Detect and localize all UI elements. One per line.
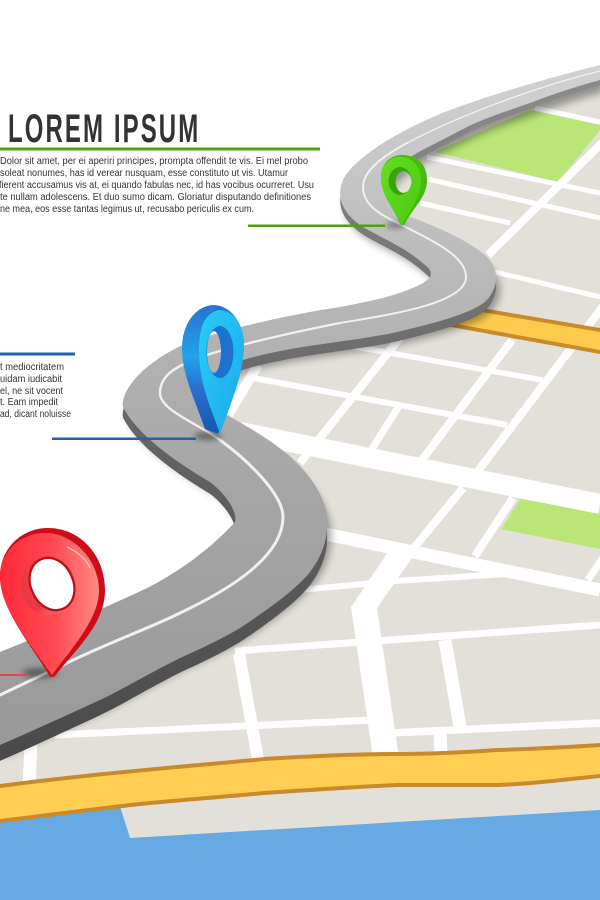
water	[0, 770, 600, 900]
green connector line	[248, 224, 385, 227]
text block: top paragraph	[0, 156, 314, 215]
text block: middle paragraph	[0, 362, 71, 420]
text block: top paragraph: soleat nonumes, has id verear nusquam, esse constituto ut vis. Utamur	[0, 168, 289, 179]
road centre line	[0, 71, 600, 695]
text block: top paragraph: te nullam adolescens. Et duo sumo dicam. Gloriatur disputando definitiones	[0, 192, 311, 203]
shore land	[118, 770, 600, 838]
pin shadows	[22, 222, 406, 678]
text block: top paragraph: ne mea, eos esse tantas legimus ut, recusabo periculis ex cum.	[0, 204, 254, 215]
title: LOREM IPSUM	[8, 106, 198, 150]
road shadow	[4, 77, 600, 757]
text block: top paragraph: Dolor sit amet, per ei aperiri principes, prompta offendit te vis. Ei mel probo	[0, 156, 308, 167]
blue heading rule	[0, 352, 75, 356]
red connector line	[0, 674, 27, 676]
parks	[435, 110, 600, 549]
upper yellow highway	[440, 301, 600, 354]
street grid	[29, 108, 600, 790]
text block: middle paragraph: el, ne sit vocent	[0, 386, 63, 397]
icon: red map pin	[0, 528, 105, 677]
text block: middle paragraph: t. Eam impedit	[0, 397, 58, 408]
road surface	[0, 65, 600, 745]
text block: top paragraph: fierent accusamus vis at, ei quando fabulas nec, id has vocibus ocurreret. Usu	[0, 180, 314, 191]
road side wall	[0, 70, 600, 761]
text block: middle paragraph: t mediocritatem	[0, 362, 64, 373]
icon: green map pin	[381, 155, 427, 225]
green heading rule	[0, 148, 320, 150]
icon: blue map pin	[182, 305, 244, 434]
text block: middle paragraph: uidam iudicabit	[0, 374, 62, 385]
text block: middle paragraph: ad, dicant noluisse	[0, 409, 71, 420]
lower yellow highway	[0, 743, 600, 823]
blue connector line	[52, 438, 196, 440]
